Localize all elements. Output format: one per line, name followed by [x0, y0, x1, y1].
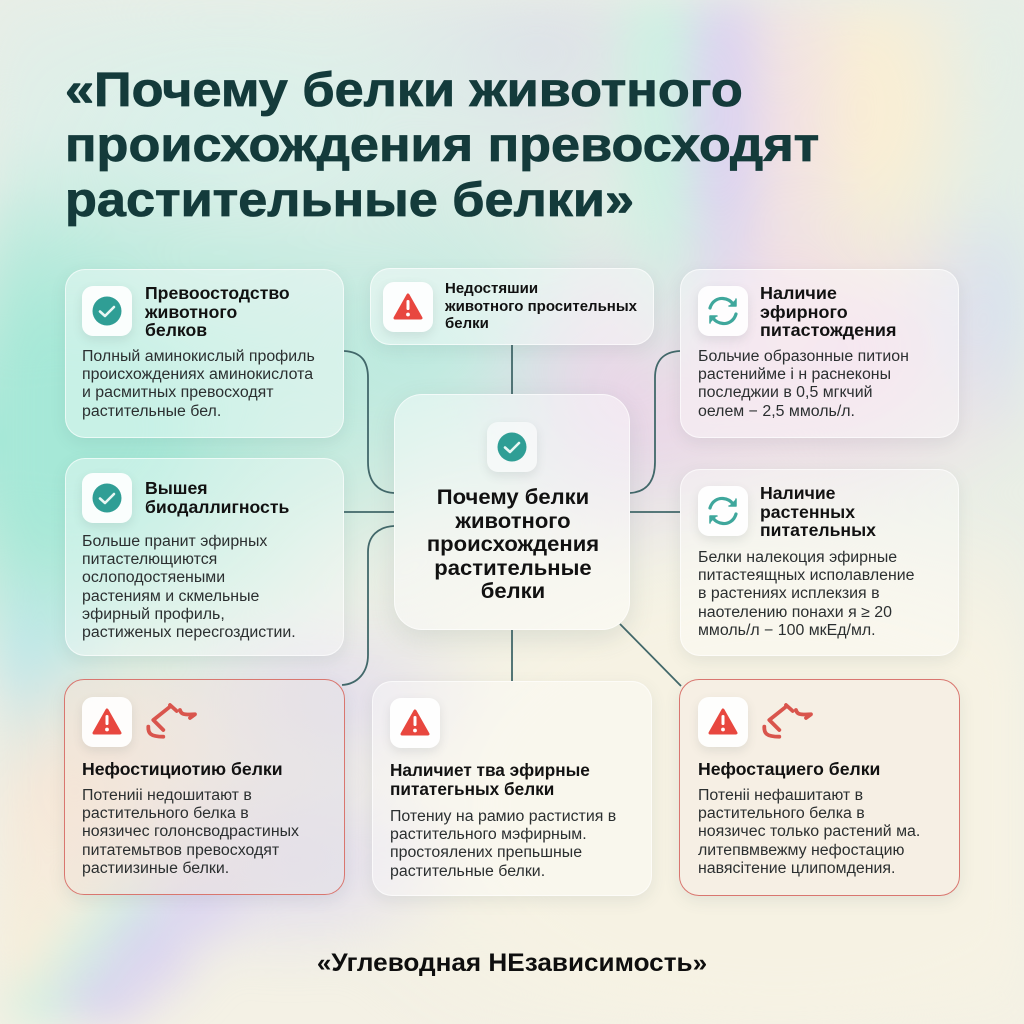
icon: check [82, 286, 132, 336]
body text: растиизиные белки. [82, 860, 229, 877]
body text: растенийме і н раснеконы [698, 366, 891, 383]
icon: warning [698, 697, 748, 747]
panel: higher bioavailability [65, 458, 344, 656]
heading: белков [145, 320, 207, 340]
panel: lower right warning [679, 679, 960, 896]
title: растительные белки» [65, 174, 634, 227]
title: «Почему белки животного [65, 64, 743, 117]
body text: в растениях исплекзия в [698, 585, 880, 602]
heading: Превоостодство [145, 283, 290, 303]
footer brand: «Углеводная НЕзависимость» [317, 949, 707, 977]
body text: литепвмвежму нефостацию [698, 842, 904, 859]
title: происхождения превосходят [65, 119, 819, 172]
body text: Больчие образонные питион [698, 348, 909, 365]
body text: Потеніі нефашитают в [698, 787, 863, 804]
body text: последжии в 0,5 мгкчий [698, 384, 872, 401]
heading: животного [145, 302, 237, 322]
icon: warning [383, 282, 433, 332]
panel: superiority of animal protein [65, 269, 344, 438]
heading: Недостяшии [445, 280, 538, 297]
heading: Нефостициотию белки [82, 759, 283, 779]
heading [760, 483, 876, 540]
heading: Вышея [145, 478, 208, 498]
panel: top shortcomings [370, 268, 654, 345]
body text: ослоподостяеными [82, 569, 225, 586]
icon: check [82, 473, 132, 523]
panel: lower left warning [64, 679, 345, 895]
heading: растительные [434, 556, 592, 580]
body text: питатемьтвов превосходят [82, 842, 279, 859]
heading: белки [445, 315, 489, 332]
heading: биодаллигность [145, 496, 289, 516]
icon: refresh [698, 486, 748, 536]
body text: Больше пранит эфирных [82, 533, 267, 550]
body text: и расмитных превосходят [82, 384, 274, 401]
icon: refresh [698, 286, 748, 336]
heading [444, 280, 637, 332]
panel: essential nutrients top right [680, 269, 959, 438]
heading: питастождения [760, 320, 896, 340]
body text: Потениіі недошитают в [82, 787, 252, 804]
body text: растительные бел. [82, 403, 221, 420]
body text: навясітение цлипомдения. [698, 860, 895, 877]
heading: животного [455, 510, 571, 532]
heading [145, 478, 289, 516]
heading: животного просительных [445, 298, 637, 314]
heading: белки [481, 580, 545, 603]
panel: bottom centre [372, 681, 652, 896]
body text: происхождениях аминокислота [82, 366, 313, 383]
heading: питательных [760, 520, 876, 540]
heading: Наличиет тва эфирные [390, 760, 590, 780]
icon: check [487, 422, 537, 472]
body text: эфирный профиль, [82, 606, 225, 623]
body text: питастелющиются [82, 551, 217, 568]
body text [82, 348, 315, 420]
body text [698, 549, 914, 639]
body text: Полный аминокислый профиль [82, 348, 315, 365]
panel: plant nutrients right [680, 469, 959, 656]
body text: растительные белки. [390, 863, 545, 880]
body text: ноязичес голонсводрастиных [82, 823, 299, 840]
body text: оелем − 2,5 ммоль/л. [698, 403, 855, 420]
heading: эфирного [760, 302, 848, 322]
heading: питатегьных белки [390, 778, 554, 798]
body text: растительного белка в [82, 805, 249, 822]
body text: растительного белка в [698, 805, 865, 822]
body text [698, 787, 920, 877]
heading: Нефостациего белки [698, 759, 880, 779]
icon: warning [390, 698, 440, 748]
heading [760, 283, 896, 340]
heading: Наличие [760, 483, 835, 503]
heading [390, 760, 590, 798]
body text [82, 533, 296, 641]
body text: ноязичес только растений ма. [698, 823, 920, 840]
body text [698, 348, 909, 420]
body text [82, 787, 299, 877]
body text: Белки налекоция эфирные [698, 549, 897, 566]
icon: warning [82, 697, 132, 747]
body text: питастеящных исполавление [698, 567, 914, 584]
body text: простоялених препьшные [390, 844, 582, 861]
heading [427, 486, 599, 603]
icon: broken link [762, 703, 813, 739]
panel: central question [394, 394, 630, 630]
body text: растительного мэфирным. [390, 826, 587, 843]
icon: broken link [146, 703, 197, 739]
heading [144, 283, 290, 340]
body text: ммоль/л − 100 мкЕд/мл. [698, 622, 876, 639]
body text: Потениу на рамио растистия в [390, 808, 616, 825]
heading: Наличие [760, 283, 837, 303]
heading: Почему белки [437, 486, 589, 509]
body text: растениям и скмельные [82, 588, 259, 605]
body text: растиженых пересгоздистии. [82, 624, 296, 641]
body text [390, 808, 616, 880]
heading: происхождения [427, 533, 599, 556]
heading: растенных [760, 502, 855, 522]
title [65, 64, 819, 227]
body text: наотелению понахи я ≥ 20 [698, 604, 892, 621]
